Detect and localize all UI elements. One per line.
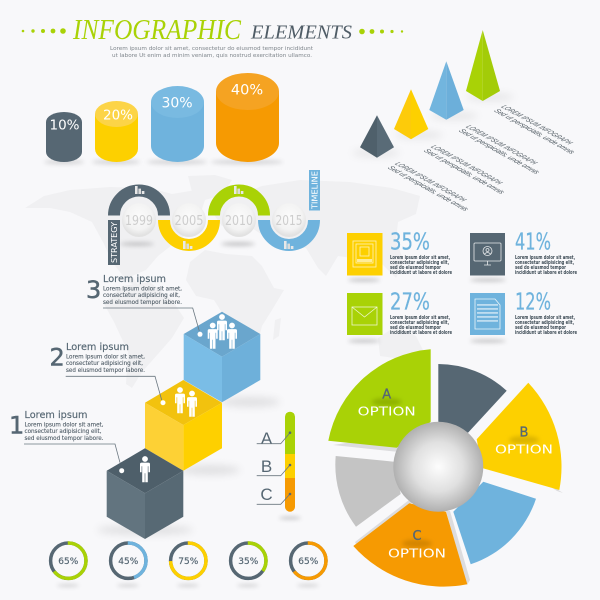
donut 65% green	[51, 543, 86, 578]
donut 75% yellow	[171, 543, 206, 578]
timeline arc 2010	[214, 190, 264, 216]
isometric caption 4: LOREM IPSUM INFOGRAPH	[393, 161, 469, 203]
isometric caption 2: Sed ut perspiciatis, unde omnis	[457, 128, 542, 175]
title	[22, 15, 403, 46]
subtitle text: Lorem ipsum dolor sit amet, consectetur do eiusmod tempor incididunt	[110, 46, 314, 52]
donut shadows	[57, 584, 319, 587]
card 12%: consectetur adipisicing elit,	[515, 320, 574, 326]
cylinder 20%	[92, 101, 140, 164]
timeline arc 2005	[164, 220, 214, 245]
card 27%: incididunt ut labore et dolore	[390, 330, 452, 336]
cube 1 dark	[107, 448, 183, 539]
segment dark	[438, 364, 507, 433]
segment C orange	[353, 503, 467, 587]
strategy label: STRATEGY	[110, 222, 119, 263]
callout 1	[9, 410, 120, 463]
option A label	[358, 387, 416, 419]
card 41%: Lorem ipsum dolor sit amet,	[515, 255, 575, 261]
heading: infographic: INFOGRAPHIC	[72, 15, 241, 46]
callout 3: 3	[86, 276, 101, 304]
card shadows	[348, 278, 506, 343]
card 27%: consectetur adipisicing elit,	[390, 320, 449, 326]
card 35%: consectetur adipisicing elit,	[390, 260, 449, 266]
option B label	[495, 426, 553, 457]
timeline arc 2015	[264, 220, 314, 245]
stat cards	[347, 230, 577, 343]
ABC vertical bar	[257, 412, 301, 520]
left title dots	[22, 28, 66, 34]
isometric caption 1: LOREM IPSUM INFOGRAPH	[499, 104, 575, 146]
segment B yellow	[477, 383, 562, 490]
callout 3: Lorem ipsum dolor sit amet,	[103, 286, 182, 292]
timeline label: TIMELINE	[310, 171, 320, 210]
cube 3 blue	[184, 312, 260, 402]
timeline discs	[122, 203, 306, 237]
option B label: OPTION	[495, 442, 553, 457]
pyramid yellow	[394, 89, 443, 139]
donut 35% green: 35%	[238, 557, 259, 567]
timeline	[108, 170, 320, 265]
card 41%: incididunt ut labore et dolore	[515, 270, 577, 276]
pyramid dark	[352, 115, 400, 158]
callout 1: Lorem ipsum dolor sit amet,	[24, 422, 104, 428]
bar labels: B	[261, 457, 272, 476]
cylinder 40%: 40%	[231, 82, 263, 98]
callout 3: sed eiusmod tempor labore.	[103, 300, 182, 306]
subtitle text: ut labore Ut enim ad minim veniam, quis nostrud exercitation ullamco.	[112, 53, 312, 59]
card 41%: sed do eiusmod tempor	[515, 265, 566, 271]
segment blue	[453, 482, 536, 564]
cube staircase	[97, 312, 280, 539]
year labels: 2005	[174, 214, 204, 229]
isometric caption 3: LOREM IPSUM INFOGRAPH	[429, 144, 505, 186]
callout 2: Lorem ipsum dolor sit amet,	[66, 354, 145, 360]
pyramid chart	[352, 30, 514, 158]
timeline arc 1999	[114, 190, 164, 216]
timeline shadows	[120, 242, 255, 246]
callout 1: 1	[9, 412, 24, 440]
donut 65% orange: 65%	[298, 557, 319, 567]
center sphere	[393, 422, 483, 512]
year labels: 2015	[276, 214, 302, 229]
callout 2: consectetur adipisicing elit,	[66, 361, 143, 367]
callout 2	[50, 342, 162, 400]
card 12%: sed do eiusmod tempor	[515, 325, 566, 331]
callout 2: 2	[50, 344, 65, 372]
cube 2 yellow	[145, 380, 222, 471]
year labels: 1999	[125, 214, 153, 229]
callout 1: consectetur adipisicing elit,	[24, 429, 102, 435]
segment shadows	[333, 426, 563, 585]
pyramid green	[466, 30, 514, 101]
callout 1: Lorem ipsum	[24, 410, 88, 421]
callout 3: Lorem ipsum	[103, 274, 166, 285]
right title dots	[359, 29, 403, 34]
bar labels: A	[261, 429, 273, 448]
people group of two	[175, 387, 197, 417]
donut 75% yellow: 75%	[178, 557, 199, 567]
card 27%	[347, 290, 452, 336]
card 27%: 27%	[390, 290, 430, 316]
card 35%: 35%	[390, 230, 430, 256]
isometric caption 3: Sed ut perspiciatis, unde omnis	[422, 148, 507, 195]
donut 65% green: 65%	[58, 557, 79, 567]
cylinder 40%	[211, 73, 283, 164]
pie chart	[328, 349, 563, 587]
year labels	[125, 214, 302, 229]
bar labels	[260, 429, 273, 504]
cylinder chart	[44, 73, 283, 164]
cylinder 30%: 30%	[161, 96, 193, 112]
cylinder 10%	[44, 112, 84, 164]
card 12%: incididunt ut labore et dolore	[515, 330, 577, 336]
option C label: C	[412, 529, 422, 544]
cylinder 10%: 10%	[49, 118, 80, 134]
card 41%: 41%	[515, 230, 551, 256]
cylinder 20%: 20%	[103, 108, 133, 124]
card 35%: sed do eiusmod tempor	[390, 265, 441, 271]
card 35%	[347, 230, 452, 276]
year labels: 2010	[225, 214, 253, 229]
small chart icons	[135, 186, 293, 249]
heading: elements: ELEMENTS	[250, 22, 352, 44]
segment gray	[335, 456, 401, 527]
option C label: OPTION	[388, 545, 446, 560]
bar leaders	[257, 431, 291, 504]
bar labels: C	[260, 485, 273, 504]
card 41%	[470, 230, 577, 276]
card 41%: consectetur adipisicing elit,	[515, 260, 574, 266]
card 12%	[470, 290, 577, 336]
donut 35% green	[231, 543, 266, 578]
option A label: A	[382, 387, 391, 402]
option A label: OPTION	[358, 404, 416, 419]
donut 45% blue	[111, 543, 146, 578]
card 35%: incididunt ut labore et dolore	[390, 270, 452, 276]
cube shadows	[97, 397, 280, 535]
card 27%: Lorem ipsum dolor sit amet,	[390, 315, 450, 321]
isometric caption 4: Sed ut perspiciatis, unde omnis	[386, 165, 471, 212]
option C label	[388, 529, 446, 560]
donut 65% orange	[291, 543, 326, 578]
world map background	[25, 175, 424, 388]
donut 45% blue: 45%	[118, 557, 139, 567]
callout 2: Lorem ipsum	[66, 342, 129, 353]
donut row	[51, 543, 326, 587]
card 27%: sed do eiusmod tempor	[390, 325, 441, 331]
pyramid blue	[429, 61, 478, 120]
callout 2: sed eiusmod tempor labore.	[66, 368, 145, 374]
single person	[140, 456, 150, 482]
segment A green	[328, 349, 431, 448]
callout 1: sed eiusmod tempor labore.	[24, 436, 104, 442]
isometric caption 2: LOREM IPSUM INFOGRAPH	[464, 124, 540, 166]
cylinder 30%	[147, 86, 207, 164]
card 12%: 12%	[515, 290, 551, 316]
callout 3	[86, 274, 199, 331]
callout 3: consectetur adipisicing elit,	[103, 293, 180, 299]
strategy label	[108, 220, 120, 265]
people group of three	[208, 314, 237, 349]
card 12%: Lorem ipsum dolor sit amet,	[515, 315, 575, 321]
card 35%: Lorem ipsum dolor sit amet,	[390, 255, 450, 261]
option B label: B	[520, 426, 528, 441]
isometric caption 1: Sed ut perspiciatis, unde omnis	[492, 108, 577, 155]
